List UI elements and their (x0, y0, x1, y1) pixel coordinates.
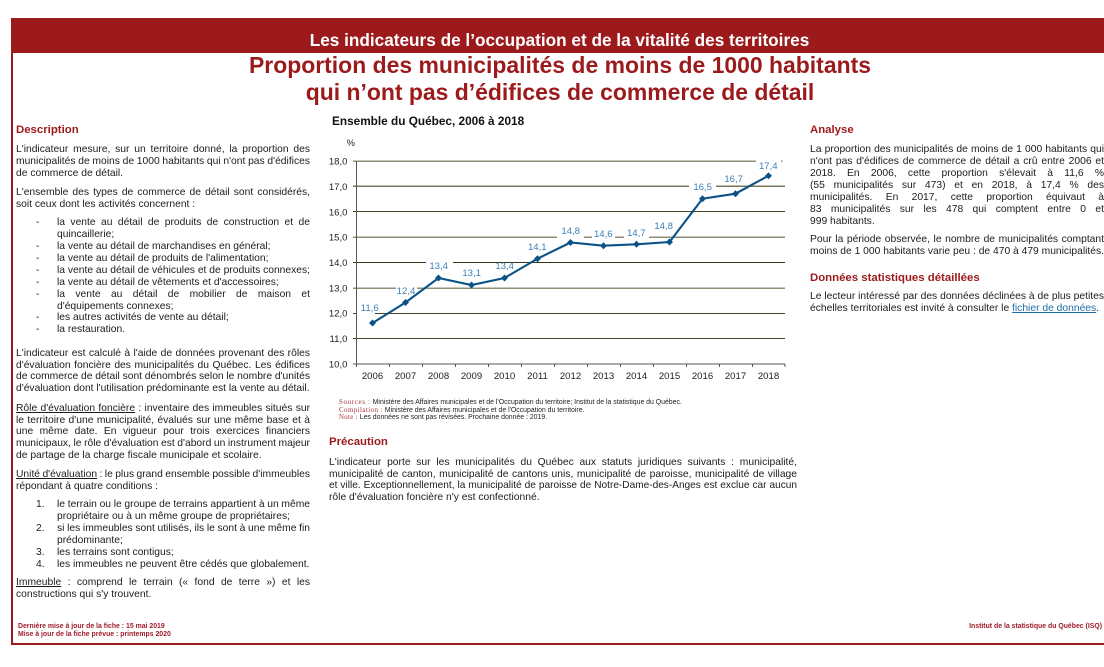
axes (353, 161, 785, 367)
text: data source: L'indicateur est calculé à l'aide de données provenant des rôles (16, 348, 310, 359)
heading: analyse: Analyse (810, 124, 854, 136)
text: building definition: constructions qui s'y trouvent. (16, 589, 151, 600)
main title: Proportion des municipalités de moins de 1000 habitants (249, 52, 871, 78)
text: types of retail (16, 187, 310, 210)
x axis labels: 2014 (626, 371, 648, 382)
list: four conditions (36, 499, 310, 570)
main title (249, 52, 871, 105)
list: four conditions: les terrains sont contigus; (57, 547, 174, 558)
text: detailed data: Le lecteur intéressé par des données déclinées à de plus petites (810, 291, 1104, 302)
footer: update dates: Mise à jour de la fiche prévue : printemps 2020 (18, 631, 171, 638)
data labels: 17,4 (759, 161, 778, 172)
bottom frame border (11, 643, 1104, 645)
list: four conditions: 2. (36, 523, 45, 534)
text: description intro: L'indicateur mesure, sur un territoire donné, la proportion des (16, 144, 310, 155)
text: description intro (16, 144, 310, 179)
data labels: 14,1 (528, 242, 547, 253)
text: description intro: municipalités de moins de 1000 habitants qui n'ont pas d'édifices (16, 156, 310, 167)
heading: precaution: Précaution (329, 436, 388, 448)
text: data source (16, 348, 310, 394)
text: precaution: et ville. Exceptionnellement, la municipalité de paroisse de Notre-Dame-des-Anges est exclue car aucun (329, 480, 797, 491)
data labels: 14,7 (627, 228, 646, 239)
list: retail activities: - (36, 312, 39, 323)
text: analyse: 2018. En 2006, cette proportion s'élevait à 11,6 % (810, 168, 1104, 179)
list: retail activities: quincaillerie; (57, 229, 114, 240)
data line (372, 176, 768, 323)
list: four conditions: les immeubles ne peuvent être cédés que globalement. (57, 559, 309, 570)
y axis labels (329, 137, 355, 370)
x axis labels: 2011 (527, 371, 548, 382)
data labels: 16,7 (724, 174, 743, 185)
data markers (369, 172, 772, 326)
text: detailed data (810, 291, 1104, 314)
x axis labels: 2010 (494, 371, 515, 382)
text: building definition: Immeuble : comprend le terrain (« fond de terre ») et les (16, 577, 310, 588)
data labels: 14,6 (594, 229, 613, 240)
list: four conditions: si les immeubles sont utilisés, ils le sont à une même fin (57, 523, 310, 534)
data labels (361, 161, 778, 314)
list: retail activities: - (36, 217, 39, 228)
text: types of retail: soit ceux dont les activités concernent : (16, 199, 195, 210)
data labels: 13,4 (429, 261, 449, 272)
data labels: 14,8 (654, 221, 673, 232)
list: retail activities: la vente au détail de mobilier de maison et (57, 289, 310, 300)
text: analyse (810, 144, 1104, 227)
text: precaution: rôle d'évaluation foncière n'y est confectionné. (329, 492, 540, 503)
text: analyse: n'ont pas d'édifices de commerce de détail a crû entre 2006 et (810, 156, 1104, 167)
y axis labels: 16,0 (329, 208, 348, 218)
data labels: 13,1 (462, 268, 481, 279)
text: detailed data: échelles territoriales est invité à consulter le fichier de données. (810, 303, 1099, 314)
text: role definition: le territoire d'une municipalité, évalués sur une même base et à (16, 415, 310, 426)
x axis labels: 2017 (725, 371, 746, 382)
text: building definition (16, 577, 310, 600)
text: precaution (329, 457, 797, 503)
list: retail activities: - (36, 265, 39, 276)
list: retail activities: - (36, 277, 39, 288)
text: precaution: L'indicateur porte sur les municipalités du Québec aux statuts juridiques suivants : municipalité, (329, 457, 797, 468)
list: four conditions: le terrain ou le groupe de terrains appartient à un même (57, 499, 310, 510)
list: retail activities: la vente au détail de véhicules et de produits connexes; (57, 265, 310, 276)
x axis labels: 2012 (560, 371, 581, 382)
text: types of retail: L'ensemble des types de commerce de détail sont considérés, (16, 187, 310, 198)
y axis labels: % (347, 137, 355, 148)
text: analyse period: moins de 1 000 habitants varie peu : de 470 à 479 municipalités. (810, 246, 1104, 257)
y axis labels: 13,0 (329, 284, 348, 294)
text: unit definition: répondant à quatre conditions : (16, 481, 158, 492)
heading: description: Description (16, 124, 79, 136)
data labels: 11,6 (361, 303, 379, 314)
list: four conditions: 3. (36, 547, 45, 558)
list: four conditions: 1. (36, 499, 45, 510)
chart title: Ensemble du Québec, 2006 à 2018 (332, 114, 524, 128)
data labels: 14,8 (561, 226, 580, 237)
x axis labels: 2015 (659, 371, 680, 382)
text: analyse: 999 habitants. (810, 216, 875, 227)
list: four conditions: 4. (36, 559, 45, 570)
x axis labels: 2008 (428, 371, 449, 382)
list: retail activities: - (36, 324, 39, 335)
text: data source: de commerce de détail sont dénombrés selon le nombre d'unités (16, 371, 310, 382)
list: retail activities: la vente au détail de produits de l'alimentation; (57, 253, 268, 264)
list: retail activities: d'équipements connexes; (57, 301, 173, 312)
x axis labels: 2007 (395, 371, 416, 382)
data labels: 13,4 (495, 261, 515, 272)
text: unit definition: Unité d'évaluation : le plus grand ensemble possible d'immeubles (16, 469, 310, 480)
y axis labels: 18,0 (329, 156, 348, 168)
x axis labels: 2013 (593, 371, 614, 382)
text: data source: d'évaluation dont l'utilisation prédominante est la vente au détail. (16, 383, 310, 394)
text: role definition: une même date. En vigueur pour trois exercices financiers (16, 426, 310, 437)
text: role definition: de partage de la charge fiscale municipale et scolaire. (16, 450, 262, 461)
text: precaution: municipalité de canton, municipalité de cantons unis, municipalité de paroisse, municipalité de village (329, 469, 797, 480)
chart compilation note: Compilation : Ministère des Affaires municipales et de l'Occupation du territoire. (339, 407, 584, 414)
list: four conditions: prédominante; (57, 535, 123, 546)
text: analyse: 83 municipalités sur les 478 qui comptent entre 0 et (810, 204, 1104, 215)
text: analyse: La proportion des municipalités de moins de 1 000 habitants qui (810, 144, 1104, 155)
header banner (11, 18, 1104, 53)
text: data source: d'évaluation foncière des municipalités du Québec. Les édifices (16, 360, 310, 371)
x axis labels (362, 371, 779, 382)
banner heading: Les indicateurs de l’occupation et de la vitalité des territoires (310, 30, 809, 50)
footer: update dates: Dernière mise à jour de la fiche : 15 mai 2019 (18, 623, 165, 630)
text: role definition: municipaux, le rôle d'évaluation est d'abord un instrument majeur (16, 438, 310, 449)
chart sources note: Sources : Ministère des Affaires municipales et de l'Occupation du territoire; Institut de la statistique du Québec. (339, 398, 682, 406)
footer: update dates (18, 622, 171, 638)
y axis labels: 11,0 (330, 334, 348, 345)
list: retail activities: la restauration. (57, 324, 125, 335)
x axis labels: 2009 (461, 371, 482, 382)
list: retail activities: - (36, 289, 39, 300)
text: unit definition (16, 469, 310, 492)
y axis labels: 15,0 (329, 232, 348, 244)
y axis labels: 14,0 (329, 258, 348, 269)
x axis labels: 2018 (758, 371, 779, 382)
list: retail activities: la vente au détail de produits de construction et de (57, 217, 310, 228)
data labels: 16,5 (693, 182, 712, 193)
list: retail activities: la vente au détail de vêtements et d'accessoires; (57, 277, 279, 288)
text: role definition: Rôle d'évaluation foncière : inventaire des immeubles situés sur (16, 403, 310, 414)
list: retail activities (36, 217, 310, 335)
heading: detailed data: Données statistiques détaillées (810, 272, 980, 284)
list: retail activities: - (36, 253, 39, 264)
y axis labels: 17,0 (329, 182, 348, 193)
label masks (357, 157, 786, 316)
x axis labels: 2016 (692, 371, 713, 382)
left frame border (11, 18, 13, 645)
footer: institute: Institut de la statistique du Québec (ISQ) (969, 623, 1102, 630)
chart data note: Note : Les données ne sont pas révisées. Prochaine donnée : 2019. (339, 414, 547, 421)
text: role definition (16, 403, 310, 461)
main title: qui n’ont pas d’édifices de commerce de détail (306, 79, 814, 105)
data labels: 12,4 (397, 286, 416, 297)
text: analyse: (55 municipalités sur 473) et en 2018, à 17,4 % des (810, 180, 1104, 191)
text: description intro: de commerce de détail. (16, 168, 123, 179)
text: analyse period: Pour la période observée, le nombre de municipalités comptant (810, 234, 1104, 245)
x axis labels: 2006 (362, 371, 383, 382)
y axis labels: 12,0 (329, 308, 348, 320)
text: analyse period (810, 234, 1104, 257)
list: four conditions: propriétaire ou à un même groupe de propriétaires; (57, 511, 290, 522)
list: retail activities: - (36, 241, 39, 252)
list: retail activities: la vente au détail de marchandises en général; (57, 241, 271, 252)
text: analyse: municipalités. En 2017, cette proportion équivaut à (810, 192, 1104, 203)
list: retail activities: les autres activités de vente au détail; (57, 312, 229, 323)
y axis labels: 10,0 (329, 360, 348, 370)
